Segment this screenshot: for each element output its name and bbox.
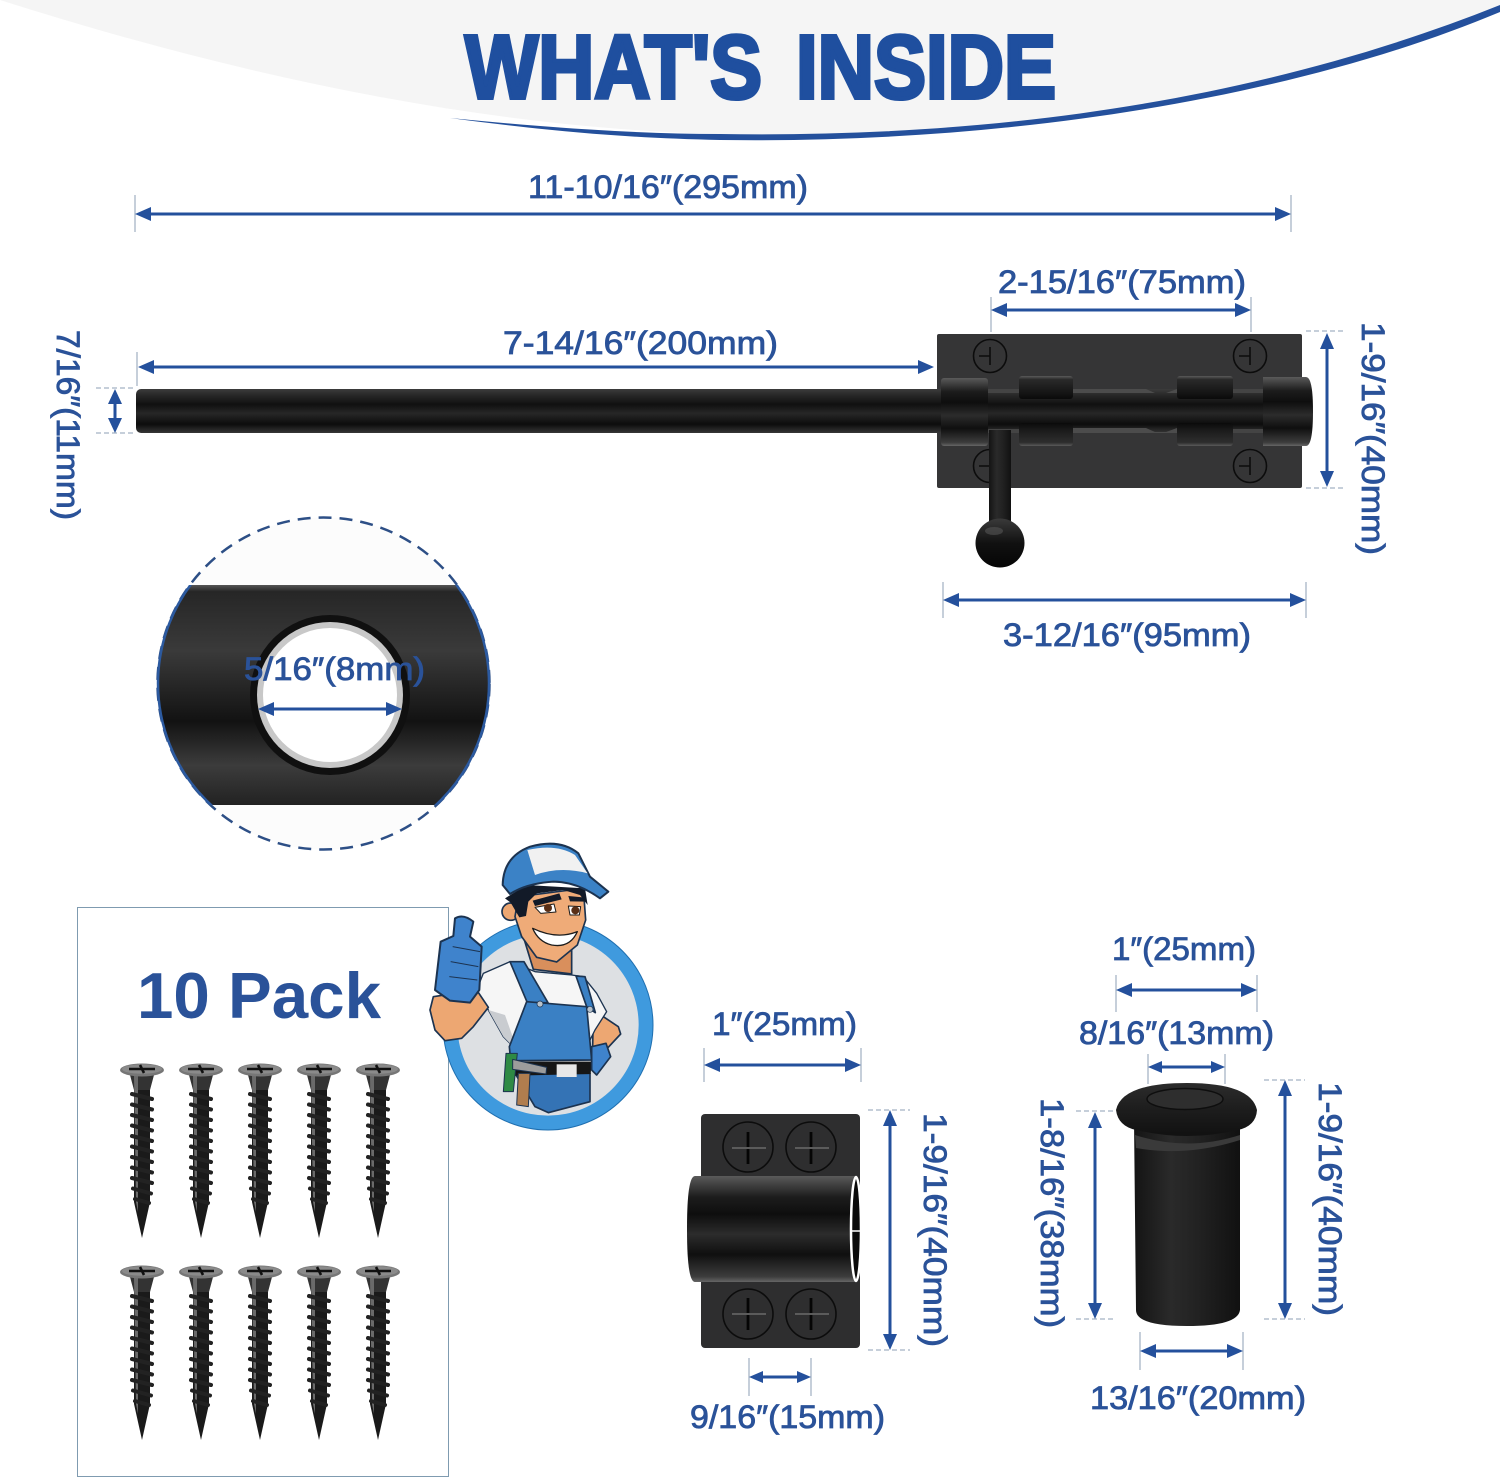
dimension: strike plate width — [704, 1006, 861, 1082]
base plate — [701, 1114, 860, 1348]
detail circle: hole diameter — [150, 518, 500, 850]
title — [465, 18, 1056, 118]
dimension: strike screw spacing — [690, 1358, 885, 1435]
shirt — [477, 962, 607, 1053]
dimension: rod length — [137, 325, 934, 386]
hole — [250, 615, 410, 775]
guide clips — [1019, 376, 1233, 446]
cap — [503, 844, 608, 898]
dimension: rod length: 7-14/16″(200mm) — [503, 325, 778, 361]
dimension: overall length: 11-10/16″(295mm) — [528, 169, 808, 205]
slide bolt latch — [136, 334, 1313, 568]
screws grid — [120, 1064, 400, 1440]
stopper collar — [1135, 1135, 1240, 1151]
dimension: plate screw spacing — [991, 264, 1251, 332]
bolt collars — [941, 377, 1313, 446]
stopper body — [1134, 1120, 1240, 1326]
title: WHAT'S — [465, 18, 762, 118]
dimension: rod diameter — [50, 330, 135, 520]
blue rim — [156, 585, 490, 805]
dimension: plate height: 1-9/16″(40mm) — [1355, 322, 1391, 555]
dimension: strike plate height: 1-9/16″(40mm) — [917, 1113, 953, 1347]
glove — [435, 916, 482, 1003]
dimension: stopper flange width — [1112, 931, 1257, 1012]
dimension: stopper total height: 1-9/16″(40mm) — [1312, 1082, 1348, 1316]
knob handle — [976, 430, 1024, 568]
dimension: strike plate width: 1″(25mm) — [712, 1006, 857, 1042]
stopper flange — [1116, 1083, 1257, 1136]
strike plate part — [687, 1114, 861, 1348]
plate screws — [974, 340, 1266, 482]
dimension: stopper total height — [1264, 1080, 1348, 1319]
dimension: stopper body height: 1-8/16″(38mm) — [1034, 1098, 1070, 1328]
right hand glove — [592, 1043, 611, 1075]
dimension: strike screw spacing: 9/16″(15mm) — [690, 1399, 885, 1435]
dimension: overall length — [135, 169, 1291, 232]
dust stopper part — [1116, 1083, 1257, 1326]
right arm — [593, 1010, 621, 1048]
dimension: plate width: 3-12/16″(95mm) — [1003, 617, 1251, 653]
dimension: stopper body height — [1034, 1098, 1116, 1328]
mounting plate — [937, 334, 1302, 488]
header swoosh background — [0, 0, 1500, 140]
plate screws — [723, 1122, 836, 1339]
diameter arrow — [258, 702, 402, 716]
dashed lens outline — [158, 518, 490, 850]
dimension: stopper body width — [1090, 1332, 1306, 1416]
dimension: plate width — [943, 582, 1306, 653]
icon: worker mascot — [430, 844, 653, 1130]
dimension: stopper flange width: 1″(25mm) — [1112, 931, 1256, 967]
sleeve opening — [851, 1177, 861, 1281]
badge circle — [443, 920, 653, 1130]
panel: screws pack — [78, 908, 448, 1476]
rod band — [150, 585, 500, 805]
dimension: plate screw spacing: 2-15/16″(75mm) — [998, 264, 1246, 300]
plate section of bolt — [988, 389, 1264, 433]
sleeve cylinder — [687, 1176, 855, 1282]
dimension: stopper cap width: 8/16″(13mm) — [1079, 1015, 1274, 1051]
head — [502, 885, 588, 974]
dimension: rod diameter: 7/16″(11mm) — [50, 330, 86, 520]
pack heading: 10 Pack — [137, 959, 382, 1032]
title: INSIDE — [796, 18, 1056, 118]
overalls — [509, 962, 595, 1113]
forearm — [430, 990, 488, 1041]
dimension: strike plate height — [868, 1110, 953, 1350]
long rod — [136, 389, 946, 433]
dimension: stopper cap width — [1079, 1015, 1274, 1084]
hole label: 5/16″(8mm) — [244, 651, 425, 687]
shirt shadow — [488, 1010, 520, 1053]
dimension: plate height — [1306, 322, 1391, 555]
tool belt — [503, 1053, 592, 1107]
stopper cap — [1147, 1088, 1223, 1110]
dimension: stopper body width: 13/16″(20mm) — [1090, 1380, 1306, 1416]
